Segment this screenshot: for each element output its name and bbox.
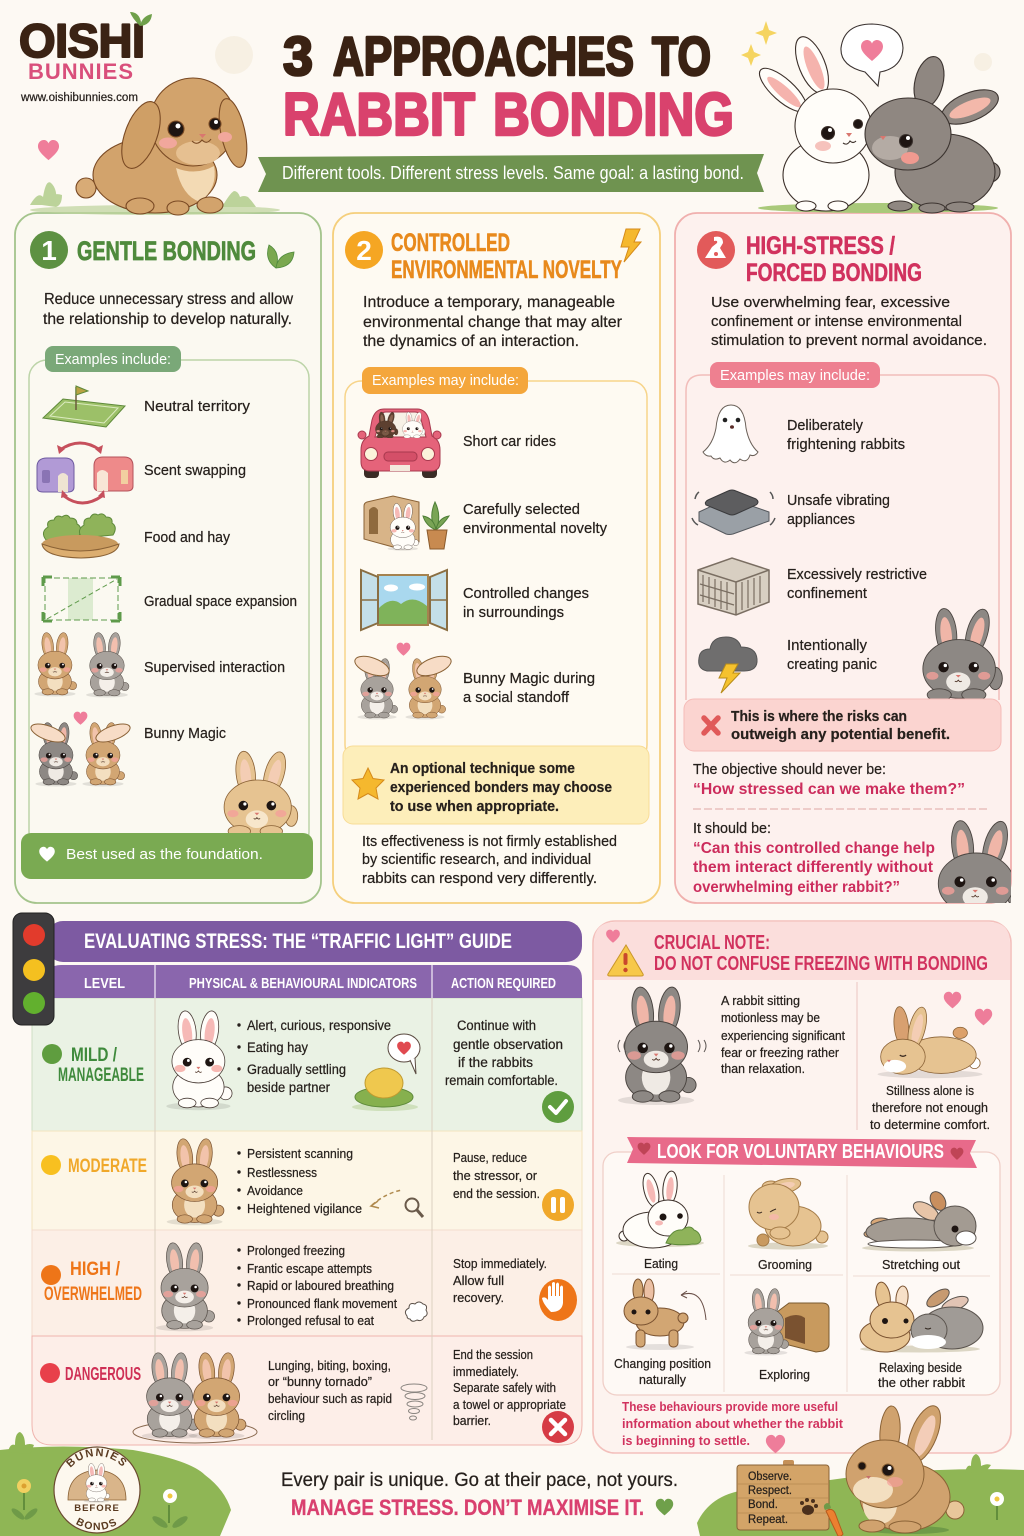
row: mild / manageable <box>42 1010 574 1123</box>
indicators: Gradually settling <box>247 1062 346 1077</box>
table column headers: PHYSICAL & BEHAVIOURAL INDICATORS <box>189 975 417 992</box>
behaviour: stretching out <box>862 1189 976 1272</box>
behaviour: relaxing beside the other: Relaxing beside <box>879 1361 962 1375</box>
illustration: fighting bunnies <box>133 1352 257 1443</box>
icon: traffic light <box>13 913 54 1025</box>
quote: controlled change <box>693 840 935 896</box>
examples tab <box>710 362 880 388</box>
row: dangerous background <box>32 1336 582 1445</box>
title: 3 <box>283 25 313 87</box>
example labels: Bunny Magic <box>144 725 226 742</box>
behaviour: grooming <box>748 1176 828 1272</box>
example labels: Excessively restrictive <box>787 566 927 583</box>
action: moderate <box>453 1150 540 1201</box>
heading: high-stress forced bonding <box>746 232 922 287</box>
example labels <box>787 417 927 673</box>
examples frame <box>686 375 999 700</box>
intro text <box>43 291 294 328</box>
callout: optional technique <box>343 746 649 824</box>
icon: tornado <box>401 1384 427 1420</box>
grass left <box>30 182 280 215</box>
icon: scent swapping houses <box>37 443 133 503</box>
icon: sprout <box>130 12 152 26</box>
callout: optional technique: An optional technique some <box>390 761 575 777</box>
title: BONDING <box>493 81 734 148</box>
heading: do not confuse freezing with bonding: CRUCIAL NOTE: <box>654 932 770 954</box>
number badge 1: 1 <box>41 235 57 266</box>
table column headers: ACTION REQUIRED <box>451 975 556 992</box>
indicators: Alert, curious, responsive <box>247 1018 391 1033</box>
icon: pink car <box>358 409 441 478</box>
illustration: lop bunny <box>76 78 252 215</box>
subtitle ribbon <box>258 154 764 192</box>
example labels <box>144 398 297 742</box>
icon: cage <box>698 558 769 615</box>
intro text: confinement or intense environmental <box>711 313 962 330</box>
icon: pink heart <box>38 140 59 160</box>
action: mild <box>445 1018 563 1088</box>
quote: controlled change: overwhelming either rabbit?” <box>693 879 900 896</box>
stillness text: to determine comfort. <box>870 1118 990 1132</box>
stillness text <box>870 1084 990 1132</box>
action: mild: if the rabbits <box>458 1055 533 1070</box>
examples frame <box>29 360 309 850</box>
peeking gray bunny, corner <box>938 820 1011 903</box>
evidence note <box>362 834 617 887</box>
objective text: The objective should never be: <box>693 762 886 778</box>
behaviour: changing position <box>614 1279 711 1387</box>
icon: carrot <box>824 1503 843 1536</box>
icon: bunny magic during standoff <box>352 643 454 720</box>
quote: controlled change: “Can this controlled change help <box>693 840 935 857</box>
intro text <box>363 294 622 350</box>
peeking tan bunny <box>224 749 298 837</box>
action: moderate: the stressor, or <box>453 1168 538 1183</box>
icon: leaves <box>268 245 294 268</box>
footer: flowers <box>10 1479 1004 1530</box>
footer: wooden sign <box>737 1460 829 1530</box>
example labels: Neutral territory <box>144 398 251 415</box>
level label: moderate: MODERATE <box>68 1156 147 1177</box>
callout: risks outweigh benefit <box>684 699 1001 751</box>
level label: mild: MANAGEABLE <box>58 1065 144 1086</box>
indicators <box>268 1358 392 1423</box>
example labels: confinement <box>787 585 868 602</box>
intro text: Reduce unnecessary stress and allow <box>44 291 294 308</box>
indicators: Frantic escape attempts <box>247 1262 372 1276</box>
icon: bunny magic pair <box>29 712 132 786</box>
indicators: behaviour such as rapid <box>268 1391 392 1406</box>
evidence note: Its effectiveness is not firmly established <box>362 834 617 850</box>
indicators: Rapid or laboured breathing <box>247 1279 394 1293</box>
footer: stamp badge: BUNNIES <box>66 1448 126 1468</box>
number badge 2 <box>345 231 383 269</box>
icon: warning triangle <box>608 945 643 976</box>
row: mild background <box>32 998 582 1131</box>
panel: controlled environmental novelty <box>333 213 660 903</box>
evidence note: by scientific research, and individual <box>362 852 591 868</box>
indicators <box>237 1018 391 1095</box>
title: TO <box>652 25 711 87</box>
level label: high: HIGH / <box>70 1259 121 1280</box>
behaviour: stretching out: Stretching out <box>882 1258 961 1272</box>
examples frame <box>345 381 647 761</box>
examples tab: Examples may include: <box>372 372 519 389</box>
action: mild: gentle observation <box>453 1037 563 1052</box>
illustration: gray bunny <box>865 53 1003 213</box>
peeking gray bunny <box>923 607 1002 701</box>
banner: look for voluntary behaviours <box>627 1137 977 1168</box>
heading: high-stress forced bonding: HIGH-STRESS / <box>746 232 895 260</box>
action: high <box>453 1256 547 1305</box>
example labels: Carefully selected <box>463 501 580 518</box>
action: mild: Continue with <box>457 1018 536 1033</box>
footer: wooden sign: Bond. <box>748 1499 778 1511</box>
action: mild: remain comfortable. <box>445 1073 558 1088</box>
example labels: Unsafe vibrating <box>787 492 890 509</box>
icon: green heart <box>656 1499 673 1515</box>
row: moderate background <box>32 1131 582 1230</box>
icon: speech bubble heart <box>841 24 903 86</box>
icon: supervised pair <box>34 632 129 697</box>
icon: sparkles <box>741 21 777 66</box>
intro text: the dynamics of an interaction. <box>363 333 579 350</box>
indicators <box>237 1146 362 1216</box>
behaviour: relaxing beside the other <box>860 1281 983 1390</box>
stillness text: Stillness alone is <box>886 1084 974 1098</box>
example labels: environmental novelty <box>463 520 607 537</box>
voluntary behaviours frame <box>603 1137 1000 1395</box>
heading: controlled environmental novelty: CONTROLLED <box>391 229 510 257</box>
intro text: Use overwhelming fear, excessive <box>711 294 950 311</box>
intro text <box>711 294 987 349</box>
level label: moderate <box>41 1155 147 1177</box>
icon: open window <box>361 570 447 630</box>
action: high: recovery. <box>453 1290 504 1305</box>
footer: stamp badge: BONDS <box>76 1518 116 1530</box>
title: APPROACHES <box>333 25 634 87</box>
grass right <box>758 203 998 213</box>
panel: crucial note <box>593 921 1011 1453</box>
icon: puff of air <box>405 1302 427 1321</box>
icon: heart <box>766 1435 785 1453</box>
example labels: frightening rabbits <box>787 436 905 453</box>
action: high: Stop immediately. <box>453 1256 547 1271</box>
row: dangerous <box>40 1347 574 1443</box>
indicators: Heightened vigilance <box>247 1201 362 1216</box>
logo wordmark: OISHI <box>19 14 145 67</box>
icon: check <box>542 1091 574 1123</box>
heading: high-stress forced bonding: FORCED BONDING <box>746 259 922 287</box>
evidence note: rabbits can respond very differently. <box>362 871 597 887</box>
intro text: the relationship to develop naturally. <box>43 311 292 328</box>
footer: wooden sign: Respect. <box>748 1485 792 1497</box>
heading: controlled environmental novelty: ENVIRONMENTAL NOVELTY <box>391 256 622 284</box>
level label: dangerous: DANGEROUS <box>65 1364 141 1384</box>
closing note: is beginning to settle. <box>622 1434 750 1448</box>
example labels: creating panic <box>787 656 877 673</box>
indicators: or “bunny tornado” <box>268 1374 372 1389</box>
callout: risks outweigh benefit: This is where the risks can <box>731 709 907 725</box>
indicators: Avoidance <box>247 1183 303 1198</box>
icon: box, bunny and plant <box>364 496 449 551</box>
callout: best used as foundation <box>21 833 313 879</box>
level label: mild <box>42 1044 144 1086</box>
row: high / overwhelmed <box>41 1242 577 1331</box>
icon: hay pile <box>352 1068 418 1111</box>
illustration: frozen bunny <box>618 986 706 1105</box>
example labels: Bunny Magic during <box>463 670 595 687</box>
freezing description: experiencing significant <box>721 1029 845 1043</box>
icon: ghost <box>703 405 758 463</box>
example labels: Controlled changes <box>463 585 589 602</box>
banner: look for voluntary behaviours: LOOK FOR VOLUNTARY BEHAVIOURS <box>657 1141 944 1163</box>
footer: stamp badge: BEFORE <box>74 1503 120 1514</box>
closing note: information about whether the rabbit <box>622 1417 844 1431</box>
indicators: circling <box>268 1408 305 1423</box>
behaviour: eating: Eating <box>644 1257 678 1271</box>
indicators: Lunging, biting, boxing, <box>268 1358 391 1373</box>
behaviour: exploring: Exploring <box>759 1368 810 1382</box>
icon: vibrating appliance <box>692 490 775 534</box>
examples tab: Examples may include: <box>720 367 870 384</box>
should-be text: It should be: <box>693 821 771 837</box>
website: www.oishibunnies.com <box>20 92 138 104</box>
logo subtitle: BUNNIES <box>28 59 133 84</box>
indicators: beside partner <box>247 1080 330 1095</box>
footer: stamp badge <box>53 1446 141 1534</box>
illustration: tan bunny <box>167 1138 224 1225</box>
footer: wooden sign: Observe. <box>748 1471 792 1483</box>
callout: best used as foundation: Best used as the foundation. <box>66 846 263 863</box>
table column headers: LEVEL <box>84 975 125 992</box>
indicators: Prolonged refusal to eat <box>247 1314 374 1328</box>
example labels: Supervised interaction <box>144 659 285 676</box>
action: dangerous: barrier. <box>453 1413 491 1428</box>
freezing description <box>721 994 845 1076</box>
example labels: Intentionally <box>787 637 867 654</box>
examples tab: Examples include: <box>55 351 171 368</box>
example labels: in surroundings <box>463 604 564 621</box>
examples tab <box>362 367 528 394</box>
icon: storm cloud <box>699 637 757 693</box>
panel: high-stress forced bonding <box>675 213 1021 917</box>
intro text: stimulation to prevent normal avoidance. <box>711 332 987 349</box>
action: dangerous: End the session <box>453 1347 533 1362</box>
number badge 2: 2 <box>356 235 372 266</box>
panel: gentle bonding <box>15 213 321 903</box>
illustration: lying bunny with hearts <box>877 992 992 1078</box>
decorative cream dots <box>215 36 992 74</box>
examples tab <box>45 346 181 372</box>
icon: cross <box>542 1411 574 1443</box>
row: moderate <box>41 1138 574 1225</box>
indicators: Restlessness <box>247 1165 317 1180</box>
freezing description: A rabbit sitting <box>721 994 800 1008</box>
freezing description: than relaxation. <box>721 1062 805 1076</box>
level label: high <box>41 1259 142 1305</box>
example labels <box>463 433 607 706</box>
title: RABBIT <box>283 81 475 148</box>
freezing description: motionless may be <box>721 1011 820 1025</box>
callout: risks outweigh benefit: outweigh any potential benefit. <box>731 727 950 743</box>
action: dangerous: Separate safely with <box>453 1380 556 1395</box>
example labels: Deliberately <box>787 417 863 434</box>
closing note: These behaviours provide more useful <box>622 1400 838 1414</box>
indicators: Eating hay <box>247 1040 308 1055</box>
table title bar <box>47 921 582 962</box>
callout: optional technique: to use when appropriate. <box>390 799 559 815</box>
icon: gradual space expansion <box>43 577 120 621</box>
footer: tan bunny <box>846 1401 964 1534</box>
illustration: gray bunny <box>156 1242 215 1331</box>
intro text: Introduce a temporary, manageable <box>363 294 615 311</box>
example labels: Short car rides <box>463 433 556 450</box>
icon: lightning <box>621 229 641 262</box>
closing note <box>622 1400 844 1448</box>
indicators: Pronounced flank movement <box>247 1297 397 1311</box>
action: moderate: Pause, reduce <box>453 1150 527 1165</box>
table column headers <box>47 965 582 998</box>
indicators: Persistent scanning <box>247 1146 353 1161</box>
icon: food and hay bowl <box>42 514 119 558</box>
intro text: environmental change that may alter <box>363 314 622 331</box>
level label: mild: MILD / <box>71 1045 118 1066</box>
behaviour: grooming: Grooming <box>758 1258 812 1272</box>
header: logo <box>19 12 152 104</box>
quote: how stressed: “How stressed can we make them?” <box>693 781 965 798</box>
icon: pause <box>542 1189 574 1221</box>
action: dangerous: a towel or appropriate <box>453 1397 566 1412</box>
example labels: Gradual space expansion <box>144 593 297 610</box>
icon: look-around arrow and magnifier <box>371 1190 423 1217</box>
footer: manage stress line: MANAGE STRESS. DON’T MAXIMISE IT. <box>291 1495 644 1520</box>
behaviour: exploring <box>744 1288 829 1382</box>
example labels: Food and hay <box>144 529 230 546</box>
subtitle ribbon: Different tools. Different stress levels. Same goal: a lasting bond. <box>282 163 744 183</box>
level label: dangerous <box>40 1363 141 1384</box>
footer: tagline: Every pair is unique. Go at their pace, not yours. <box>281 1470 678 1491</box>
action: dangerous <box>453 1347 566 1428</box>
panel: traffic light stress table <box>13 913 582 1445</box>
icon: stop hand <box>539 1279 577 1321</box>
footer: wooden sign: Repeat. <box>748 1514 788 1526</box>
table title bar: EVALUATING STRESS: THE “TRAFFIC LIGHT” GUIDE <box>84 930 512 953</box>
heading: gentle bonding: GENTLE BONDING <box>77 236 256 266</box>
behaviour: eating <box>616 1170 704 1271</box>
level label: high: OVERWHELMED <box>44 1284 142 1305</box>
number badge 1 <box>30 231 68 269</box>
icon: heart bubble <box>388 1034 420 1074</box>
illustration: white bunny <box>166 1010 232 1110</box>
heading: controlled environmental novelty <box>391 229 622 284</box>
illustration: white bunny <box>753 32 871 211</box>
number badge 3 <box>697 231 735 269</box>
indicators: Prolonged freezing <box>247 1244 345 1258</box>
quote: controlled change: them interact differently without <box>693 859 933 876</box>
action: high: Allow full <box>453 1273 504 1288</box>
indicators <box>237 1244 397 1328</box>
behaviour: relaxing beside the other: the other rabbit <box>878 1376 966 1390</box>
example labels: Scent swapping <box>144 462 246 479</box>
row: high background <box>32 1230 582 1336</box>
example labels: a social standoff <box>463 689 570 706</box>
behaviour: changing position: naturally <box>639 1373 687 1387</box>
heading: do not confuse freezing with bonding <box>654 932 988 975</box>
action: dangerous: immediately. <box>453 1364 519 1379</box>
behaviour: changing position: Changing position <box>614 1357 711 1371</box>
title <box>283 25 734 148</box>
example labels: appliances <box>787 511 855 528</box>
footer: hills <box>0 1432 1024 1536</box>
icon: neutral territory mat <box>43 386 125 427</box>
stillness text: therefore not enough <box>872 1101 988 1115</box>
callout: optional technique: experienced bonders may choose <box>390 780 612 796</box>
icon: heart <box>606 930 620 943</box>
freezing description: fear or freezing rather <box>721 1046 839 1060</box>
action: moderate: end the session. <box>453 1186 540 1201</box>
